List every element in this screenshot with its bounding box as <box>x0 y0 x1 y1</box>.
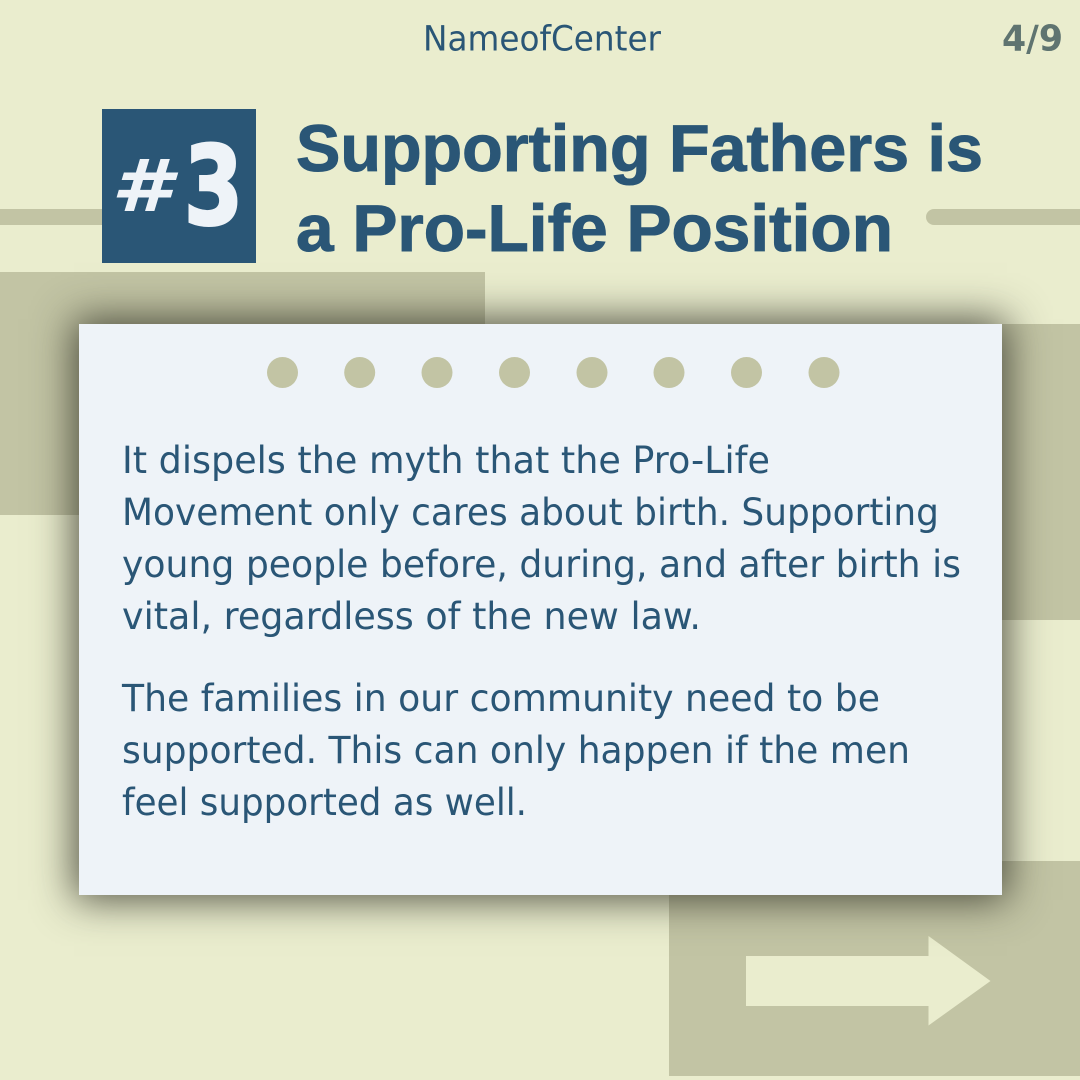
body text: It dispels the myth that the Pro-Life <box>122 439 770 482</box>
body text: supported. This can only happen if the men <box>122 729 910 772</box>
panel: text card <box>79 324 1002 895</box>
title: Supporting Fathers is <box>296 111 983 185</box>
body text: The families in our community need to be <box>121 677 880 720</box>
right background panel <box>1000 324 1080 620</box>
left accent bar <box>0 209 110 225</box>
body text: feel supported as well. <box>122 781 527 824</box>
body text: young people before, during, and after birth is <box>122 543 961 586</box>
header: center name: NameofCenter <box>423 20 662 60</box>
body text: vital, regardless of the new law. <box>122 595 701 638</box>
left background panel <box>0 272 485 515</box>
title: a Pro-Life Position <box>296 191 893 265</box>
page number: 4/9 <box>1002 18 1063 60</box>
badge: number 3: 3 <box>184 123 243 250</box>
right accent bar <box>926 209 1080 225</box>
body text <box>121 439 961 824</box>
badge: number 3: # <box>111 144 179 228</box>
badge: number 3 <box>102 109 256 263</box>
punched dots <box>267 357 840 388</box>
title <box>296 111 983 265</box>
icon: next arrow <box>746 936 990 1026</box>
body text: Movement only cares about birth. Supporting <box>122 491 939 534</box>
bottom-right background panel <box>669 861 1080 1076</box>
